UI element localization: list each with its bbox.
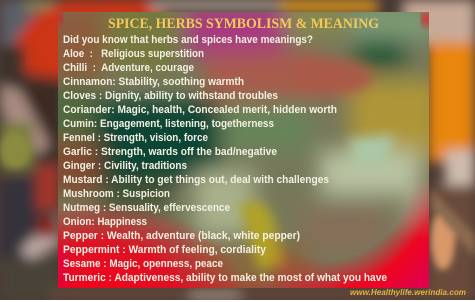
text block: herb meanings list: Mustard : Ability to get things out, deal with challenges (63, 174, 329, 186)
text block: herb meanings list: Turmeric : Adaptiveness, ability to make the most of what you have (63, 272, 387, 284)
panel: red band along the bottom edge (195, 275, 308, 288)
text block: herb meanings list: Aloe : Religious superstition (63, 48, 204, 60)
text block: herb meanings list (63, 34, 387, 284)
panel: red glow bottom left (58, 203, 236, 288)
text block: herb meanings list: Cinnamon: Stability, soothing warmth (63, 76, 244, 88)
text block: herb meanings list: Ginger : Civility, traditions (63, 160, 187, 172)
text block: herb meanings list: Fennel : Strength, vision, force (63, 132, 208, 144)
panel: red crescent glow bottom right (270, 182, 429, 288)
title: SPICE, HERBS SYMBOLISM & MEANING (108, 16, 379, 32)
text block: herb meanings list: Chilli : Adventure, courage (63, 62, 194, 74)
text block: herb meanings list: Peppermint : Warmth of feeling, cordiality (63, 244, 266, 256)
text block: herb meanings list: Cumin: Engagement, listening, togetherness (63, 118, 274, 130)
background: cinnamon and turmeric slices (0, 132, 475, 270)
text block: herb meanings list: Did you know that herbs and spices have meanings? (63, 34, 313, 46)
text block: herb meanings list: Cloves : Dignity, ability to withstand troubles (63, 90, 278, 102)
panel: semi-transparent gradient card (45, 5, 440, 288)
text block: herb meanings list: Nutmeg : Sensuality, effervescence (63, 202, 230, 214)
text block: herb meanings list: Onion: Happiness (63, 216, 147, 228)
text block: herb meanings list: Pepper : Wealth, adventure (black, white pepper) (63, 230, 300, 242)
text block: herb meanings list: Sesame : Magic, openness, peace (63, 258, 223, 270)
text block: herb meanings list: Coriander: Magic, health, Concealed merit, hidden worth (63, 104, 337, 116)
website credit: www.Healthylife.werindia.com (350, 288, 466, 297)
text block: herb meanings list: Mushroom : Suspicion (63, 188, 170, 200)
text block: herb meanings list: Garlic : Strength, wards off the bad/negative (63, 146, 277, 158)
